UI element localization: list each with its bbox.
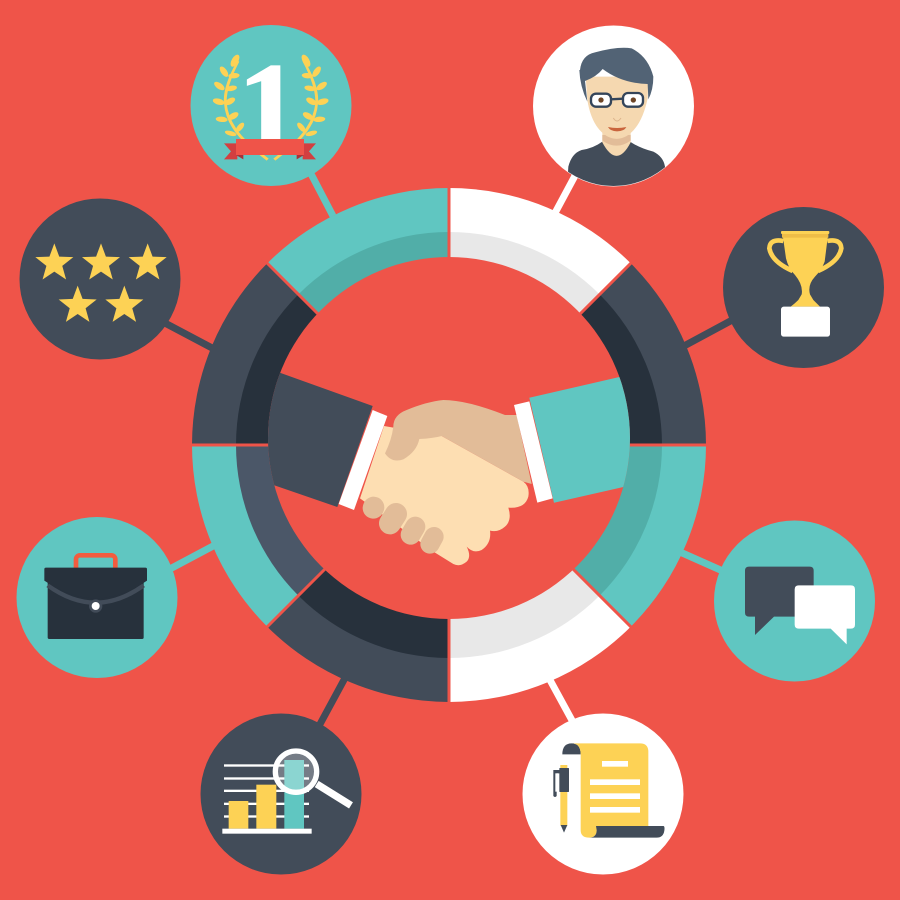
nose xyxy=(613,118,621,121)
icon circle: person avatar xyxy=(533,26,694,193)
yellow bar short xyxy=(229,801,248,829)
fingers xyxy=(373,507,434,544)
central segmented ring xyxy=(185,180,712,710)
icon circle: briefcase xyxy=(16,517,178,678)
hair xyxy=(579,48,653,102)
briefcase flap line xyxy=(48,585,144,603)
chart baseline xyxy=(222,829,312,834)
neck xyxy=(602,132,631,156)
star 3 xyxy=(129,243,167,279)
trophy rim xyxy=(781,231,829,234)
star 2 xyxy=(82,243,120,279)
briefcase body xyxy=(48,575,144,639)
icon circle: speech bubbles xyxy=(714,520,875,682)
icon circle: trophy xyxy=(723,207,884,368)
pen xyxy=(553,765,569,833)
text lines xyxy=(590,761,640,813)
shirt xyxy=(568,142,665,186)
right sleeve xyxy=(529,377,630,503)
mouth xyxy=(608,127,626,131)
icon circle: first place laurel xyxy=(190,25,352,186)
star 1 xyxy=(35,243,73,279)
briefcase handle xyxy=(76,555,115,575)
icon circle: five stars xyxy=(20,198,180,360)
upper dark hand xyxy=(385,400,532,484)
laurel wreath xyxy=(212,53,329,161)
grid lines xyxy=(224,764,309,818)
star 5 xyxy=(105,286,143,322)
dark speech bubble xyxy=(745,567,814,635)
handshake xyxy=(268,372,630,566)
teal bar tall xyxy=(284,760,304,829)
yellow bar medium xyxy=(256,785,276,829)
scroll page xyxy=(572,743,648,838)
face xyxy=(586,77,648,139)
lower light hand xyxy=(360,426,529,565)
clasp xyxy=(89,599,102,613)
star 4 xyxy=(59,286,97,322)
icon circle: contract scroll and pen xyxy=(522,714,684,874)
right cuff xyxy=(514,401,553,503)
icon circle: bar chart with magnifier xyxy=(200,714,362,874)
connector lines xyxy=(163,170,736,726)
left cuff xyxy=(339,410,387,510)
scroll top curl xyxy=(562,743,581,754)
glasses xyxy=(591,93,643,107)
numeral one: 1 xyxy=(237,38,301,178)
trophy handles xyxy=(769,240,793,271)
trophy cup xyxy=(783,235,828,307)
magnifier xyxy=(275,751,351,805)
scroll bottom curl xyxy=(589,826,665,838)
left sleeve xyxy=(268,372,373,507)
trophy base xyxy=(781,307,830,337)
white speech bubble xyxy=(795,585,855,644)
briefcase flap xyxy=(44,568,147,598)
ribbon banner xyxy=(224,139,316,159)
